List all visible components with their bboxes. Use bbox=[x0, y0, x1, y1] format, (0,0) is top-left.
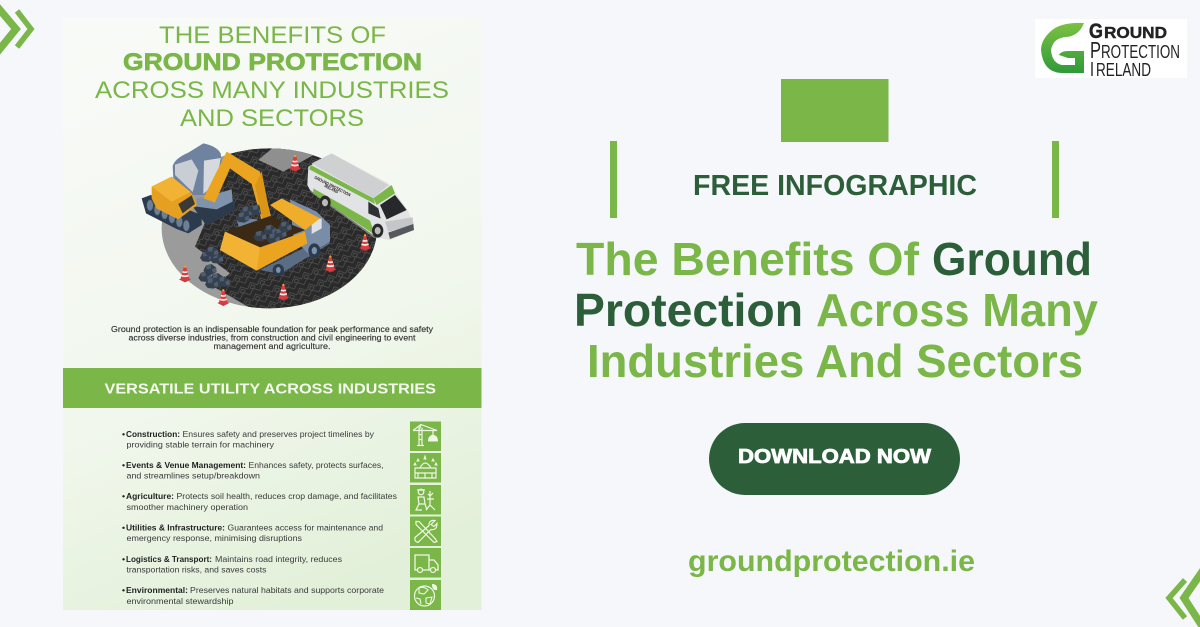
item: agriculture bbox=[122, 491, 398, 512]
intro paragraph: across diverse industries, from construction and civil engineering to event bbox=[128, 332, 416, 342]
list of industries bbox=[122, 429, 398, 606]
excavator bbox=[142, 143, 273, 236]
poster title: AND SECTORS bbox=[180, 105, 364, 132]
illustration: excavator, tipper truck and van on ground mats bbox=[142, 143, 414, 313]
main heading: Ground bbox=[932, 233, 1092, 285]
item: events bbox=[122, 460, 384, 480]
item: utilities: emergency response, minimising disruptions bbox=[126, 533, 303, 543]
item: events: Enhances safety, protects surfaces, bbox=[248, 460, 384, 470]
logo wordmark: G bbox=[1089, 20, 1103, 43]
item: utilities bbox=[122, 522, 383, 543]
item: utilities: Utilities & Infrastructure: bbox=[126, 522, 225, 532]
item: utilities: Guarantees access for maintenance and bbox=[228, 522, 383, 532]
logo wordmark: P bbox=[1090, 37, 1101, 63]
item: environmental: Environmental: bbox=[126, 585, 188, 595]
item: construction: Construction: bbox=[126, 429, 180, 439]
item: logistics: transportation risks, and saves costs bbox=[126, 564, 267, 574]
main heading: Protection bbox=[574, 284, 803, 336]
website url: groundprotection.ie bbox=[688, 545, 975, 578]
panel: infographic poster preview bbox=[63, 17, 482, 610]
icon: crane bbox=[410, 422, 441, 451]
subtitle: FREE INFOGRAPHIC bbox=[693, 170, 977, 202]
logo mark bbox=[1041, 23, 1084, 73]
item: construction: providing stable terrain for machinery bbox=[126, 440, 275, 450]
logo wordmark bbox=[1089, 20, 1180, 81]
item: utilities: • bbox=[122, 522, 125, 532]
poster title: GROUND PROTECTION bbox=[123, 49, 422, 76]
icon: tools bbox=[410, 516, 441, 546]
main heading bbox=[574, 233, 1098, 387]
icon: events bbox=[410, 453, 441, 482]
main heading: The Benefits Of bbox=[576, 233, 920, 285]
logo wordmark: RELAND bbox=[1096, 60, 1151, 80]
item: events: and streamlines setup/breakdown bbox=[126, 470, 260, 480]
intro paragraph: management and agriculture. bbox=[214, 341, 330, 351]
green square bbox=[781, 79, 888, 142]
item: logistics bbox=[122, 554, 343, 574]
item: construction: Ensures safety and preserves project timelines by bbox=[182, 429, 375, 439]
item: environmental bbox=[122, 585, 384, 606]
logo bbox=[1035, 19, 1187, 81]
item: construction bbox=[122, 429, 375, 450]
item: events: • bbox=[122, 460, 125, 470]
logo wordmark: ROUND bbox=[1104, 25, 1167, 42]
item: logistics: • bbox=[122, 554, 125, 564]
icon: globe bbox=[410, 580, 441, 610]
download button bbox=[709, 423, 960, 495]
ground mat ellipse bbox=[162, 148, 376, 308]
main heading: Across Many bbox=[816, 284, 1098, 336]
intro paragraph bbox=[111, 324, 434, 351]
intro paragraph: Ground protection is an indispensable foundation for peak performance and safety bbox=[111, 324, 434, 334]
left vertical bar bbox=[610, 141, 617, 218]
poster title: ACROSS MANY INDUSTRIES bbox=[95, 77, 449, 104]
right vertical bar bbox=[1052, 141, 1059, 218]
tipper truck bbox=[220, 198, 330, 276]
item: agriculture: Agriculture: bbox=[126, 491, 174, 501]
icon: top-left chevrons bbox=[0, 3, 31, 56]
van: IRELAND bbox=[324, 183, 339, 194]
section banner: VERSATILE UTILITY ACROSS INDUSTRIES bbox=[104, 380, 436, 398]
item: agriculture: • bbox=[122, 491, 125, 501]
item: agriculture: Protects soil health, reduces crop damage, and facilitates bbox=[176, 491, 398, 501]
download button: DOWNLOAD NOW bbox=[738, 446, 931, 468]
item: events: Events & Venue Management: bbox=[126, 460, 246, 470]
icon: agriculture bbox=[410, 485, 441, 514]
item: agriculture: smoother machinery operation bbox=[126, 502, 248, 512]
logo wordmark: I bbox=[1090, 59, 1094, 81]
section banner bbox=[63, 368, 482, 408]
item: environmental: environmental stewardship bbox=[126, 596, 234, 606]
item: environmental: Preserves natural habitats and supports corporate bbox=[190, 585, 384, 595]
item: construction: • bbox=[122, 429, 125, 439]
item: logistics: Maintains road integrity, reduces bbox=[215, 554, 343, 564]
item: logistics: Logistics & Transport: bbox=[126, 554, 212, 564]
van: GROUND PROTECTION bbox=[314, 175, 351, 197]
poster title bbox=[95, 22, 449, 132]
icon: bottom-right chevrons bbox=[1169, 566, 1200, 627]
rock piles bbox=[198, 246, 230, 289]
item: environmental: • bbox=[122, 585, 125, 595]
poster title: THE BENEFITS OF bbox=[159, 22, 386, 49]
traffic cones bbox=[179, 155, 371, 306]
van bbox=[307, 153, 414, 240]
icon: truck bbox=[410, 548, 441, 578]
main heading: Industries And Sectors bbox=[587, 335, 1083, 387]
